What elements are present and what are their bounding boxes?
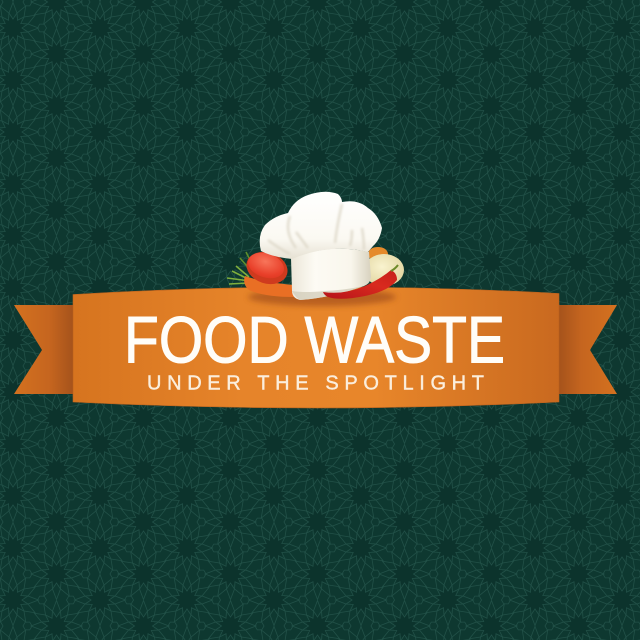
ribbon tail: left — [14, 305, 74, 394]
illustration: chef hat with vegetables — [227, 192, 404, 306]
ribbon tail: right — [558, 305, 617, 394]
tomato slice rim — [242, 247, 292, 289]
hat folds — [268, 204, 364, 254]
carrot — [244, 276, 294, 297]
shadow on banner — [248, 288, 396, 306]
title: FOOD WASTE — [124, 302, 505, 376]
hat puff — [260, 192, 382, 259]
chili stem — [391, 265, 398, 271]
banner: main orange ribbon — [73, 287, 559, 408]
band shading — [292, 286, 364, 300]
tomato slice flesh — [245, 248, 287, 283]
chili pepper — [323, 270, 397, 299]
subtitle: UNDER THE SPOTLIGHT — [147, 372, 484, 394]
orange vegetable behind hat — [368, 247, 388, 261]
onion — [364, 254, 404, 286]
herb sprig — [227, 252, 254, 284]
hat band — [291, 249, 371, 300]
